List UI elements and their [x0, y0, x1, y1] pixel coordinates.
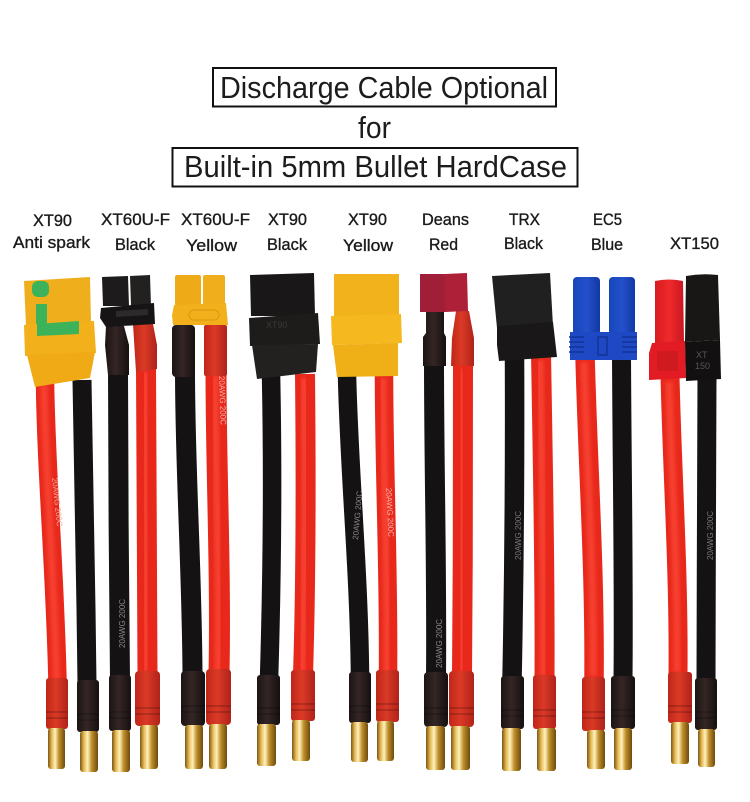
- cable: XT90 black: [249, 273, 320, 766]
- red lead: [204, 325, 231, 769]
- label: TRX Black: TRX: [509, 210, 540, 229]
- connector: Deans red: [420, 273, 468, 312]
- red lead: [668, 375, 692, 764]
- label: XT60U-F Black: XT60U-F: [101, 210, 170, 229]
- cable: XT60U-F black: [100, 275, 160, 772]
- connector: XT90 yellow: [331, 274, 402, 377]
- cable: TRX black: [492, 273, 557, 771]
- label: XT90 Yellow: Yellow: [343, 236, 394, 255]
- label: Deans Red: [422, 210, 469, 254]
- heading: for: for: [358, 110, 391, 145]
- red lead: [291, 374, 315, 761]
- red lead: 20AWG 200C: [217, 376, 228, 425]
- label: XT60U-F Black: [101, 210, 170, 254]
- connector: XT150 red: [649, 280, 686, 380]
- label: TRX Black: [504, 210, 543, 253]
- red lead: [44, 380, 68, 769]
- red lead: [376, 374, 399, 761]
- black lead: [257, 374, 280, 766]
- label: XT90 Yellow: [343, 210, 394, 255]
- label: EC5 Blue: Blue: [591, 235, 623, 254]
- label: XT90 Yellow: XT90: [348, 210, 387, 229]
- label: XT60U-F Black: Black: [115, 235, 155, 254]
- connector: XT150 black: [685, 274, 721, 381]
- connector: TRX black: [492, 273, 557, 361]
- label: TRX Black: Black: [504, 234, 543, 253]
- label: XT60U-F Yellow: [181, 210, 250, 255]
- cable: XT90 yellow: [331, 274, 402, 762]
- black lead: [347, 374, 371, 762]
- black lead: 20AWG 200C: [435, 619, 444, 668]
- red lead: [582, 355, 605, 769]
- label: XT90 Anti spark: [13, 211, 91, 252]
- black lead: [172, 325, 205, 769]
- label: EC5 Blue: [591, 210, 623, 254]
- cable: XT60U-F yellow: [172, 275, 231, 769]
- cable: XT150: [649, 274, 721, 767]
- label: XT90 Anti spark: XT90: [33, 211, 72, 230]
- label: XT90 Black: XT90: [268, 210, 307, 229]
- label: XT150: XT150: [670, 234, 719, 253]
- label: XT60U-F Yellow: Yellow: [186, 236, 238, 255]
- black lead: [423, 311, 448, 770]
- black lead: [695, 375, 717, 767]
- heading: discharge cable optional: Discharge Cable Optional: [220, 70, 548, 105]
- black lead: [501, 355, 524, 771]
- label: XT60U-F Yellow: XT60U-F: [181, 210, 250, 229]
- connector: XT150 black: XT: [696, 350, 708, 360]
- connector: XT90 black: [249, 273, 320, 379]
- connector: EC5 blue: [569, 277, 637, 360]
- black lead: 20AWG 200C: [351, 490, 364, 540]
- connector: XT150 black: 150: [695, 361, 710, 371]
- red lead: [133, 324, 160, 769]
- black lead: [611, 355, 635, 770]
- cable: XT90 anti spark: [24, 277, 99, 772]
- connector: XT90 black: XT90: [266, 320, 288, 330]
- connector: XT60U black: [100, 275, 155, 327]
- label: XT90 Black: [267, 210, 307, 254]
- label: XT90 Black: Black: [267, 235, 307, 254]
- cable: EC5 blue: [569, 277, 637, 770]
- red lead: 20AWG 200C: [50, 477, 64, 527]
- black lead: [105, 326, 131, 772]
- black lead: 20AWG 200C: [514, 511, 523, 560]
- heading: built-in 5mm bullet hardcase: Built-in 5mm Bullet HardCase: [184, 149, 567, 184]
- label: Deans Red: Deans: [422, 210, 469, 229]
- label: Deans Red: Red: [429, 235, 458, 254]
- connector: XT60U yellow: [172, 275, 228, 325]
- cable: Deans red: [420, 273, 474, 770]
- label: EC5 Blue: EC5: [593, 210, 622, 229]
- black lead: [77, 380, 99, 772]
- black lead: 20AWG 200C: [118, 599, 127, 648]
- red lead: [449, 311, 474, 770]
- connector: XT90 anti spark yellow: [24, 277, 96, 387]
- red lead: 20AWG 200C: [384, 488, 396, 537]
- label: XT90 Anti spark: Anti spark: [13, 233, 91, 252]
- red lead: [533, 353, 556, 771]
- black lead: 20AWG 200C: [706, 511, 715, 560]
